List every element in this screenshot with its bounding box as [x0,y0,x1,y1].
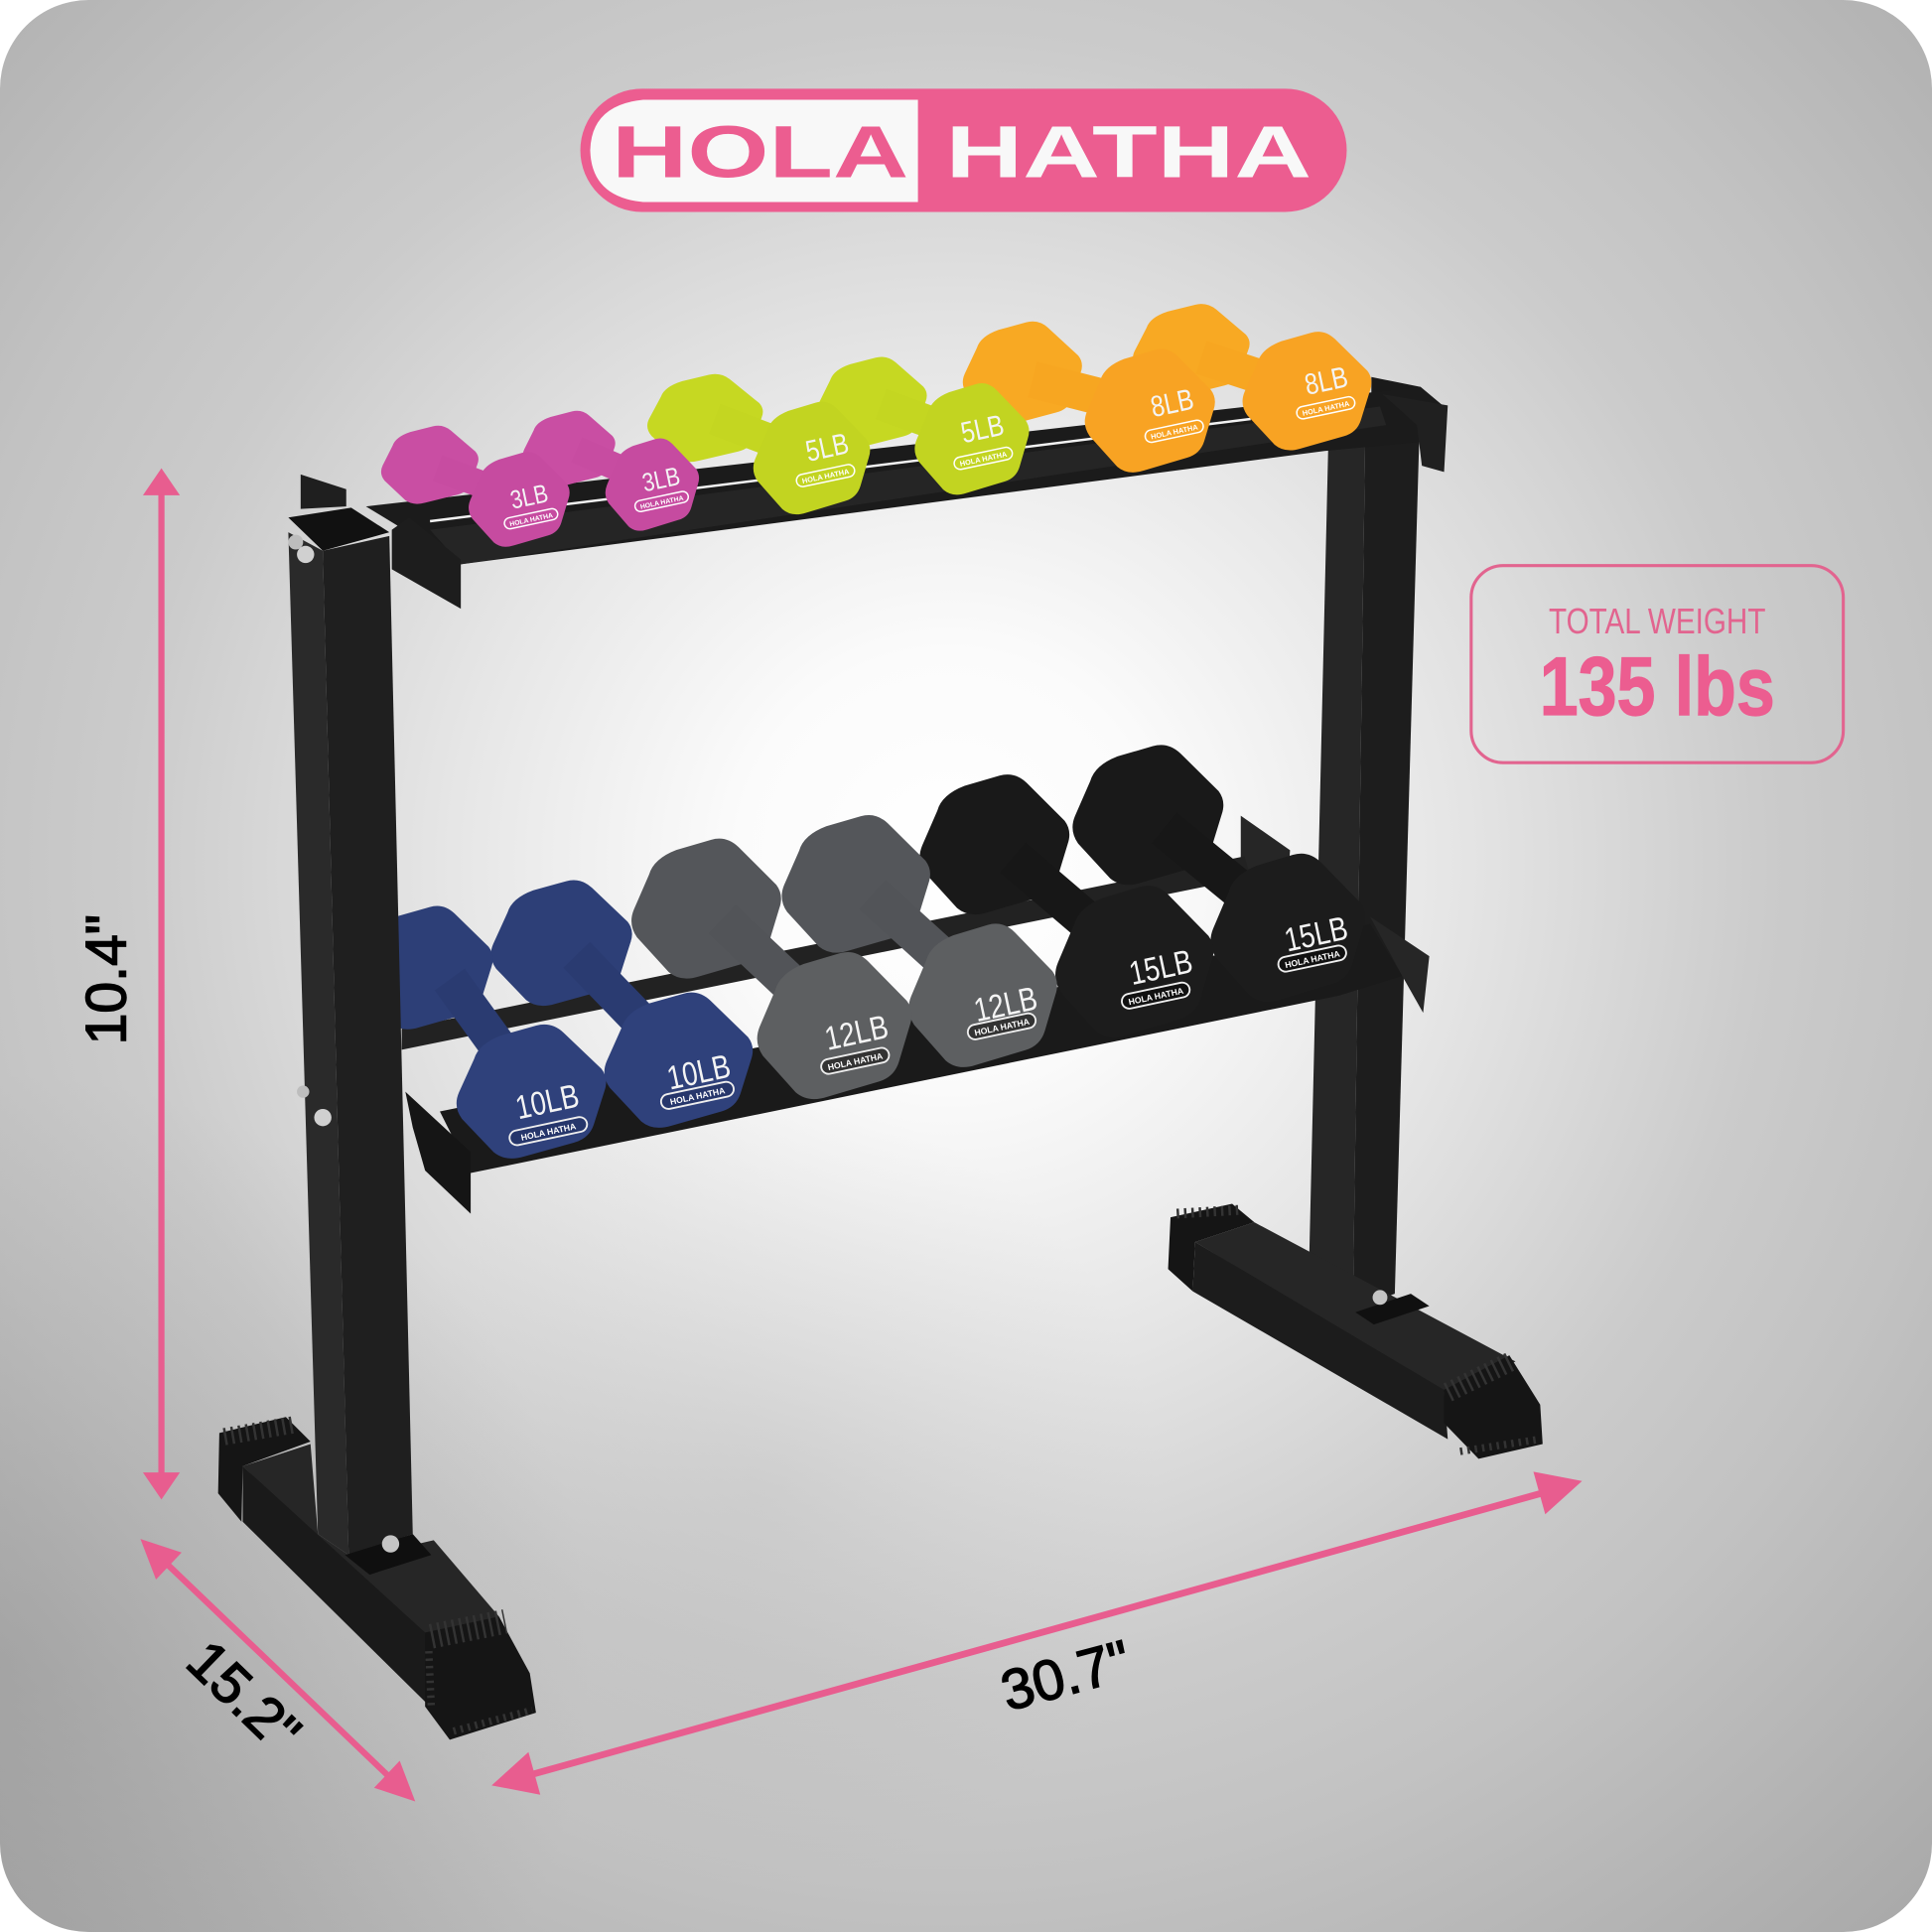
dumbbell: 5LB right [817,356,1030,494]
arrow: depth [140,1539,415,1801]
rack: left post [288,532,413,1555]
dumbbell: 3LB left [381,426,570,547]
dumbbell: 8LB right: HOLA HATHA [1302,399,1351,418]
callout: total weight [1471,566,1844,762]
dumbbell: 15LB right [1072,745,1365,1002]
rack: left foot [218,1417,536,1739]
dumbbell: 5LB right: HOLA HATHA [959,450,1009,469]
callout: total weight: TOTAL WEIGHT [1549,601,1765,641]
callout: total weight: 135 lbs [1540,640,1775,733]
dumbbell: 5LB left [647,374,870,514]
dimension: height: 10.4" [75,914,139,1044]
dumbbell: 3LB right: HOLA HATHA [639,495,684,511]
arrow: height [143,469,180,1499]
dumbbell: 8LB left: 8LB [1148,382,1196,424]
dumbbell: 10LB right [491,881,753,1128]
dimension: width: 30.7" [995,1628,1137,1724]
dumbbell: 12LB right: 12LB [971,980,1040,1030]
rack: lower tray left end plate [405,1092,471,1213]
logo: HolaHatha: HATHA [946,111,1311,194]
logo: HolaHatha [581,88,1346,211]
dumbbell: 12LB left: 12LB [822,1009,892,1057]
dumbbell: 12LB left: HOLA HATHA [827,1050,885,1072]
dumbbell: 8LB left: HOLA HATHA [1150,422,1199,441]
rack: right foot [1169,1204,1543,1458]
dimension: depth: 15.2" [175,1628,313,1765]
dumbbell: 10LB left [357,906,607,1159]
dumbbell: 5LB right: 5LB [958,408,1007,450]
dumbbell: 15LB left [919,774,1213,1037]
dumbbell: 5LB left: 5LB [802,426,852,468]
dumbbell: 15LB right: 15LB [1281,909,1351,959]
rack: top tray [288,377,1448,609]
dumbbell: 15LB left: HOLA HATHA [1128,986,1185,1007]
dumbbell: 3LB right: 3LB [639,462,683,498]
dumbbell: 10LB left: 10LB [512,1077,582,1127]
dumbbell: 3LB left: 3LB [508,479,551,515]
dumbbell: 3LB right [523,411,699,531]
logo: HolaHatha: HOLA [612,111,908,194]
dumbbell: 10LB right: 10LB [664,1047,734,1097]
dumbbell: 8LB left [963,322,1215,473]
dumbbell: 12LB right [781,815,1057,1067]
dumbbell: 10LB left: HOLA HATHA [520,1121,578,1143]
rack: lower tray [402,816,1430,1173]
rack: right post [1309,431,1420,1309]
dumbbell: 10LB right: HOLA HATHA [669,1085,727,1107]
dumbbell: 12LB left [631,839,911,1099]
dumbbell: 12LB right: HOLA HATHA [974,1017,1031,1037]
dumbbell: 8LB right: 8LB [1302,359,1350,401]
dumbbell: 15LB left: 15LB [1126,943,1196,993]
dumbbell: 15LB right: HOLA HATHA [1284,948,1341,970]
arrow: width [491,1471,1583,1795]
dumbbell: 8LB right [1133,304,1371,451]
dumbbell: 5LB left: HOLA HATHA [801,467,851,485]
dumbbell: 3LB left: HOLA HATHA [509,512,554,528]
